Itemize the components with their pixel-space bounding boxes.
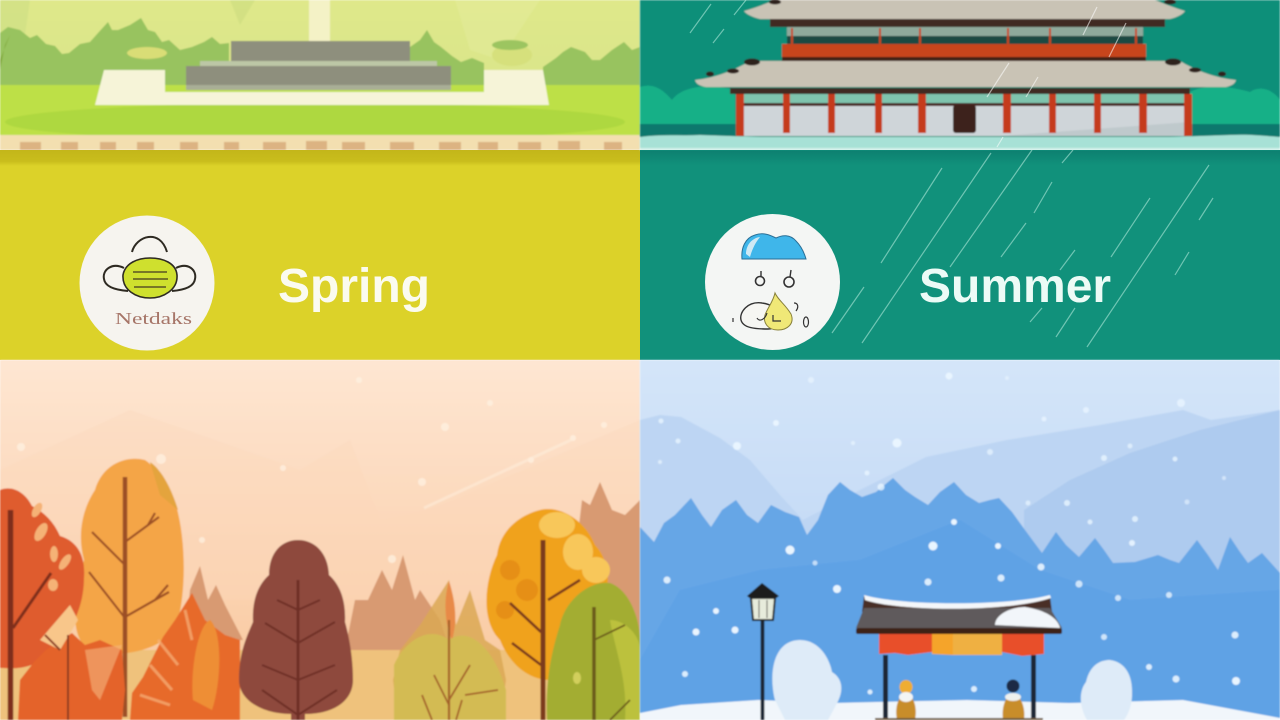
panel: summer [640,0,1280,360]
snow-covered bush right [1081,660,1132,720]
tree: red left [0,488,84,720]
snow-covered bush left [772,640,841,720]
panel: autumn [0,360,640,720]
upper storey [770,19,1165,61]
distant conifers [185,482,640,650]
tree: bright orange spiky [130,593,240,720]
heading: summer: Summer [919,260,1111,313]
spring label band [0,150,640,360]
summer scene: palace in the rain [640,0,1280,150]
autumn far haze [0,410,640,600]
autumn sky [0,360,640,720]
snowfall [658,372,1240,694]
bushes [640,86,1280,138]
tree: brown centre [239,540,353,720]
icon: face mask badge [80,216,214,350]
snowy ground [640,700,1280,720]
tree: yellow-green [393,580,506,720]
columns [736,94,1192,136]
falling light specks [17,377,607,563]
winter sky [640,360,1280,720]
pavilion roof [856,595,1062,634]
icon: rain cloud badge [705,214,840,350]
monument: steps [186,41,451,90]
panel: winter [640,360,1280,720]
heading: spring: Spring [278,260,430,313]
street lamp [747,583,779,720]
tree: low orange-red [18,605,125,720]
summer label band [640,150,1280,360]
roof finials [706,0,1226,76]
monument: pillar [309,0,330,41]
icon caption: Netdaks [115,309,192,328]
palace [695,0,1236,136]
seated person left [896,680,916,720]
tree: green right [547,583,640,720]
tree: tall orange [75,459,184,717]
pavement [0,135,640,150]
blue treeline [640,478,1280,720]
upper roof [744,0,1185,19]
seated person right [1003,680,1024,720]
lower roof [695,61,1236,87]
monument: stone base [95,70,549,105]
autumn ground [0,650,640,720]
flooded ground [640,135,1280,150]
pavilion curtain [879,634,1044,656]
rain streaks [690,0,1213,347]
tree: orange-yellow [486,509,610,720]
door [953,105,976,133]
snow-roofed pavilion [856,595,1062,720]
treeline shadow layer [640,520,1280,720]
bench [875,718,1043,720]
far mountains [640,410,1280,620]
pavilion posts [883,655,1036,720]
spring scene: monument park [0,0,640,150]
panel: spring [0,0,640,360]
